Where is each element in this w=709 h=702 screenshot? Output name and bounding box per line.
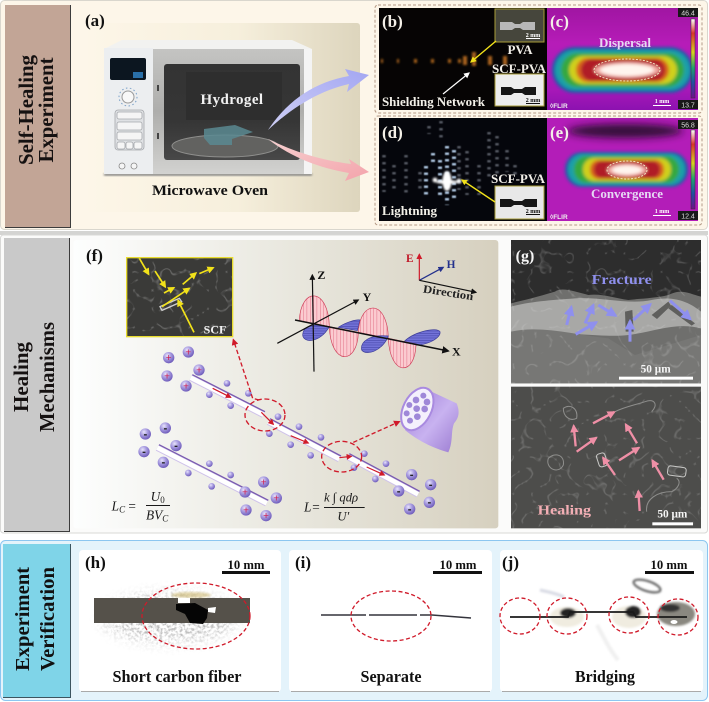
panel g: fracture and healing micrographs (511, 240, 701, 528)
formula: critical length: 0 (160, 495, 165, 505)
microwave display (110, 58, 146, 80)
hydrogel block (204, 125, 253, 145)
micrograph: fracture: 50 μm (641, 363, 671, 375)
positive charges: + (166, 353, 172, 364)
burn hole (176, 603, 208, 624)
label lightning: Lightning (382, 203, 437, 218)
colour scale: 46.4 (681, 10, 695, 18)
scale bar (433, 558, 482, 574)
microwave dial (119, 88, 137, 106)
direction key (406, 253, 476, 303)
inset: SCF-PVA sample: 2 mm (526, 98, 540, 104)
panel i: separate (289, 550, 492, 692)
dashed highlight (142, 583, 250, 649)
burnt fiber strip (94, 598, 250, 623)
caption: Separate (360, 667, 422, 686)
formula: critical length: L (112, 498, 119, 513)
scale bar: 10 mm (228, 558, 265, 572)
label: hydrogel: Hydrogel (201, 92, 263, 108)
label PVA: PVA (507, 42, 533, 57)
bridged fiber (510, 612, 687, 617)
section: experiment verification (0, 540, 708, 700)
panel h: short carbon fiber (79, 550, 281, 692)
sidebar: self-healing experiment: Self-Healing (14, 55, 38, 165)
negative charges: - (143, 428, 147, 440)
bright light columns (426, 146, 454, 205)
wave diagram: Y (363, 290, 372, 304)
colour scale: 56.8 (681, 122, 695, 130)
dashed frame: shielding results (375, 5, 702, 113)
wave diagram (277, 268, 461, 372)
formula: critical length: C (162, 514, 169, 524)
icon: microwave oven (104, 40, 312, 176)
arrow: yellow to network (471, 41, 496, 62)
wave diagram: Z (317, 268, 325, 282)
sidebar: experiment verification (3, 544, 71, 698)
caption: Short carbon fiber (112, 667, 242, 686)
label: shielding network: Shielding Network (382, 94, 486, 109)
direction key: Direction (422, 283, 475, 303)
arrow: white to network (443, 73, 469, 94)
arrow: pink to lightning result (268, 139, 369, 181)
micrograph: healing (511, 387, 701, 528)
formula: critical length: BV (146, 508, 162, 523)
positive charges (161, 346, 282, 522)
inset: SCF micrograph: SCF (204, 322, 226, 336)
FLIR mark: ◊FLIR (550, 103, 568, 110)
negative charges: - (397, 485, 401, 497)
current arrows on fibers (213, 388, 384, 475)
panel b: shielding network (379, 8, 547, 110)
label i: (i) (295, 553, 311, 572)
arrow: blue to shielding result (268, 69, 369, 130)
dashed frame: lightning results (375, 116, 702, 225)
negative charges: - (163, 422, 167, 434)
dim light columns (384, 121, 515, 195)
formula: critical length: C (119, 504, 126, 514)
formula: critical length (111, 489, 170, 524)
magnetic field lobes behind (338, 320, 440, 345)
microwave knobs (119, 163, 137, 169)
positive charges: + (196, 365, 202, 376)
scale bar: 1 mm (655, 209, 669, 215)
negative charges: - (410, 469, 414, 481)
soot marks (540, 577, 695, 660)
label convergence: Convergence (591, 186, 663, 201)
positive charges: + (273, 493, 279, 504)
arrow: yellow to bright spot (462, 180, 495, 202)
label: microwave oven: Microwave Oven (152, 183, 269, 199)
panel c: dispersal thermal map (547, 8, 698, 110)
label dispersal: Dispersal (599, 35, 651, 50)
scale bar: 1 mm (655, 99, 669, 105)
negative charges: - (142, 446, 146, 458)
scale bar: 10 mm (440, 558, 477, 572)
electric field lobes (299, 296, 416, 368)
soot smudge (102, 594, 238, 642)
scale bar: 10 mm (650, 558, 688, 572)
colour scale: 12.4 (681, 214, 695, 220)
dashed callout circles (245, 399, 362, 472)
sidebar: healing mechanisms: Healing (9, 342, 33, 412)
micrograph: fracture: Fracture (592, 273, 652, 288)
sidebar: experiment verification: Experiment (12, 567, 34, 671)
label j: (j) (502, 553, 519, 572)
magnetic field lobes front (303, 325, 388, 353)
dashed highlight (351, 591, 431, 641)
formula: critical length: U (151, 489, 160, 504)
caption: Bridging (575, 667, 636, 686)
positive charges: + (263, 511, 269, 522)
turntable tray (172, 135, 278, 157)
inset: PVA sample: 2 mm (526, 33, 540, 39)
negative charges: - (174, 440, 178, 452)
sidebar: healing mechanisms (4, 238, 70, 532)
positive charges: + (183, 381, 189, 392)
panel j: bridging (500, 550, 703, 692)
label f: (f) (86, 246, 103, 265)
sidebar: self-healing experiment: Experiment (34, 57, 58, 162)
micrograph: healing: 50 μm (657, 509, 688, 521)
FLIR mark: ◊FLIR (550, 214, 568, 221)
positive charges: + (185, 347, 191, 358)
negative charges (138, 422, 436, 515)
positive charges: + (164, 371, 170, 382)
colour scale (678, 8, 698, 110)
dashed highlights (500, 597, 698, 635)
label SCF-PVA: SCF-PVA (491, 171, 546, 186)
sidebar: experiment verification: Verification (37, 567, 59, 671)
scale bar (645, 558, 694, 574)
micrograph: fracture: (g) (516, 248, 534, 265)
formula: length integral (303, 491, 365, 523)
scale bar (653, 209, 671, 216)
label SCF-PVA: SCF-PVA (492, 61, 547, 76)
icon: fiber bundle (395, 382, 459, 452)
arrow: to fiber bundle (353, 422, 399, 442)
separated fiber (321, 615, 471, 618)
sidebar: self-healing experiment (5, 5, 71, 228)
formula: length integral: k ∫ qdρ (324, 491, 358, 506)
microwave buttons (115, 110, 144, 150)
formula: length integral: U′ (337, 509, 349, 523)
label c: (c) (550, 12, 569, 31)
wave diagram: X (452, 345, 461, 359)
negative charges: - (408, 503, 412, 515)
section: healing mechanisms (0, 231, 708, 533)
label h: (h) (85, 553, 106, 572)
direction key: H (447, 259, 456, 271)
scale bar (222, 558, 270, 574)
sidebar: healing mechanisms: Mechanisms (35, 322, 59, 432)
positive charges: + (243, 505, 249, 516)
inset: SCF-PVA sample: 2 mm (526, 209, 540, 215)
negative charges: - (427, 497, 431, 509)
scale bar (653, 99, 671, 106)
formula: length integral: L= (303, 500, 320, 515)
positive charges: + (261, 477, 267, 488)
panel f: mechanism diagram (73, 240, 498, 528)
colour scale (678, 120, 698, 220)
section: self-healing experiment (0, 0, 708, 230)
panel d: lightning (379, 118, 547, 221)
inset: SCF-PVA sample (495, 186, 544, 219)
negative charges: - (429, 479, 433, 491)
central flash (433, 171, 461, 191)
small carriers (185, 380, 389, 490)
micrograph: fracture (511, 240, 701, 383)
carbon fibers (157, 375, 420, 503)
label e: (e) (550, 123, 569, 142)
label a: (a) (85, 11, 105, 30)
inset: SCF-PVA sample (495, 74, 544, 106)
arrow: to SCF micrograph (233, 340, 259, 400)
label d: (d) (382, 123, 403, 142)
label b: (b) (382, 12, 403, 31)
panel a: microwave oven (88, 23, 369, 212)
colour scale: 13.7 (681, 102, 695, 110)
formula: critical length: = (125, 498, 136, 513)
positive charges: + (242, 487, 248, 498)
inset: PVA sample (495, 9, 544, 42)
negative charges: - (161, 457, 165, 469)
panel e: convergence thermal map (547, 118, 698, 221)
inset: SCF micrograph (127, 258, 233, 337)
micrograph: healing: Healing (538, 503, 591, 518)
direction key: E (406, 253, 414, 265)
